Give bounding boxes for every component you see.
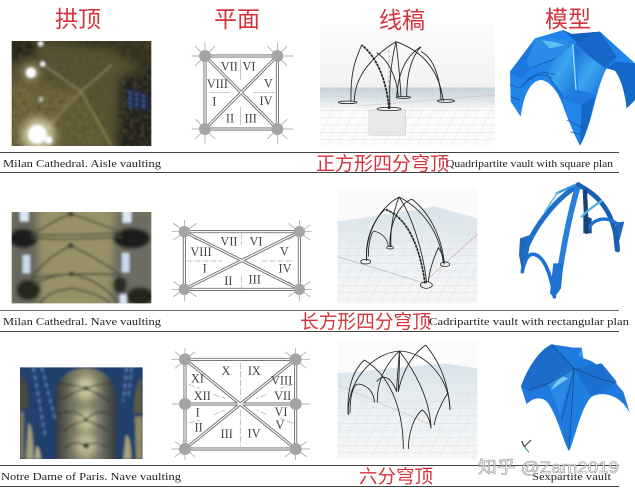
- wireframe: sexpartite: [338, 340, 477, 459]
- plan: square eight-part: VIII: [207, 77, 228, 91]
- plan: rectangular twelve-part: IV: [247, 426, 261, 440]
- caption: Notre Dame nave: Notre Dame of Paris. Nave vaulting: [1, 472, 182, 483]
- plan: rectangular eight-part: II: [224, 274, 232, 288]
- photo: Milan Cathedral nave vault: [12, 212, 152, 304]
- plan: rectangular eight-part: V: [280, 244, 289, 258]
- plan: square eight-part: V: [264, 76, 273, 90]
- caption: Milan aisle: Milan Cathedral. Aisle vaulting: [3, 159, 162, 170]
- plan: square eight-part: I: [212, 95, 216, 109]
- plan: rectangular twelve-part: VIII: [271, 373, 292, 387]
- 3D model: rectangular quadripartite: [519, 185, 624, 298]
- icon: axis triad: [522, 440, 531, 452]
- title: wireframe column: 线稿: [379, 7, 425, 33]
- 3D model: square quadripartite: [510, 30, 635, 146]
- caption: quadripartite square: Quadripartite vault with square plan: [446, 159, 614, 170]
- caption: sexpartite vault: Sexpartite vault: [532, 472, 611, 483]
- plan: rectangular twelve-part: X: [222, 364, 231, 378]
- plan: square eight-part: II: [226, 111, 234, 125]
- plan: square eight-part: VI: [242, 60, 256, 74]
- rule: row 2 bottom: [0, 330, 619, 332]
- plan: rectangular twelve-part: V: [276, 418, 285, 432]
- label: rectangular quadripartite vault: 长方形四分穹顶: [300, 311, 431, 333]
- watermark: 知乎 @Zam2019: [478, 458, 619, 477]
- label: square quadripartite vault: 正方形四分穹顶: [316, 153, 449, 175]
- plan: rectangular twelve-part: III: [221, 427, 233, 441]
- plan: rectangular twelve-part: II: [195, 421, 203, 435]
- photo: Milan Cathedral aisle vault: [12, 41, 152, 146]
- rule: row 2 top: [0, 310, 619, 312]
- plan: rectangular eight-part: III: [249, 273, 261, 287]
- plan: rectangular twelve-part: I: [196, 405, 200, 419]
- rule: row 3 bottom: [0, 486, 619, 488]
- plan: rectangular twelve-part: VII: [274, 389, 291, 403]
- rule: row 3 top: [0, 464, 619, 466]
- plan: rectangular eight-part: [172, 220, 312, 301]
- plan: rectangular eight-part: IV: [278, 261, 292, 275]
- label: sexpartite vault: 六分穹顶: [359, 466, 433, 487]
- wireframe: rectangular quadripartite: [338, 188, 477, 303]
- plan: rectangular eight-part: VII: [220, 234, 238, 248]
- plan: rectangular twelve-part: [172, 348, 310, 460]
- 3D model: sexpartite: [521, 344, 630, 452]
- plan: rectangular twelve-part: XI: [191, 372, 204, 386]
- photo: Notre Dame nave vault: [20, 367, 143, 459]
- caption: Milan nave: Milan Cathedral. Nave vaulting: [3, 317, 162, 328]
- title: plan column: 平面: [214, 6, 260, 32]
- plan: rectangular eight-part: I: [203, 261, 207, 275]
- plan: square eight-part: III: [245, 111, 257, 125]
- title: vault column: 拱顶: [55, 6, 101, 32]
- plan: rectangular twelve-part: IX: [248, 364, 261, 378]
- plan: rectangular twelve-part: VI: [274, 405, 288, 419]
- rule: row 1 bottom: [0, 172, 619, 174]
- rule: row 1 top: [0, 152, 619, 154]
- plan: rectangular twelve-part: XII: [194, 389, 211, 403]
- plan: rectangular eight-part: VIII: [190, 245, 212, 259]
- plan: square eight-part: VII: [221, 60, 238, 74]
- plan: square eight-part: [192, 43, 293, 143]
- plan: rectangular eight-part: VI: [249, 234, 263, 248]
- caption: quadripartite rectangular: Cadripartite vault with rectangular plan: [429, 317, 630, 328]
- wireframe: square quadripartite: [320, 24, 495, 145]
- title: model column: 模型: [545, 6, 591, 32]
- plan: square eight-part: IV: [259, 94, 273, 108]
